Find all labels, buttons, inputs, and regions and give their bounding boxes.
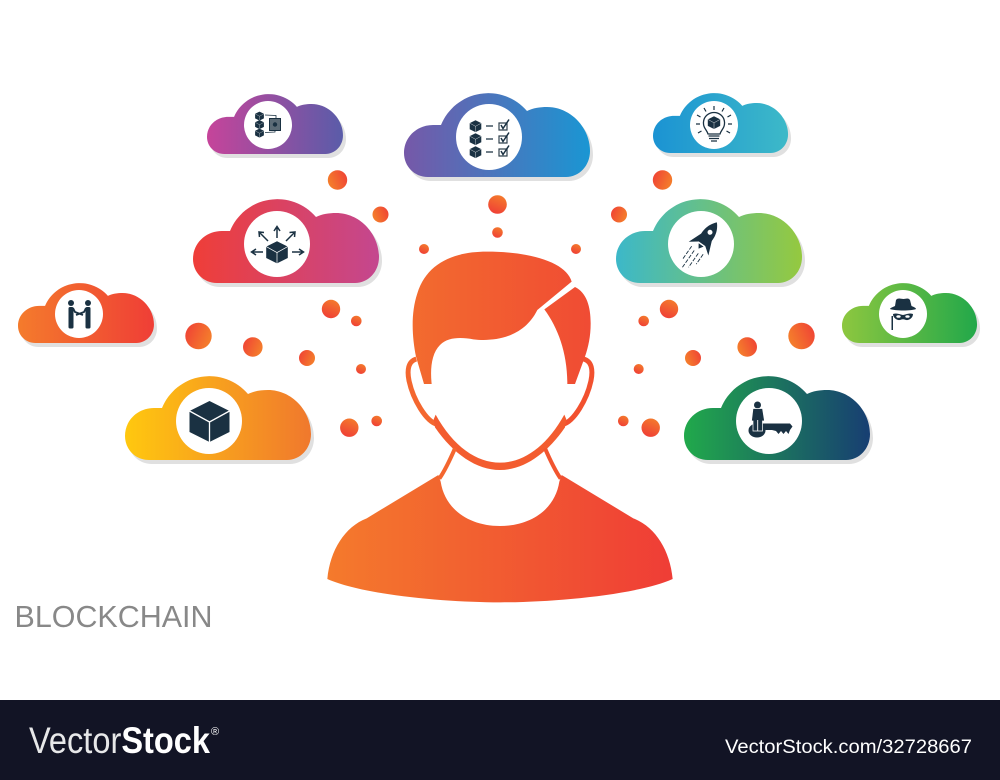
cloud: blue checklist xyxy=(404,93,593,181)
cloud: red distribution xyxy=(193,199,382,287)
dots: connecting bubbles xyxy=(185,170,815,437)
icon: hat and mask xyxy=(890,299,916,330)
cloud: cyan lightbulb xyxy=(653,93,791,157)
title: BLOCKCHAIN: BLOCKCHAIN xyxy=(14,599,212,634)
cloud: orange handshake xyxy=(18,283,157,347)
icon: rocket xyxy=(674,216,727,276)
icon: handshake xyxy=(68,300,91,328)
icon: cube checklist xyxy=(470,120,509,158)
cloud: teal key xyxy=(684,376,873,464)
cloud: green mask xyxy=(842,283,980,347)
torso xyxy=(327,475,673,602)
icon: cube xyxy=(190,401,230,442)
face and neck outline xyxy=(408,359,592,479)
central person xyxy=(327,252,673,602)
hair: main xyxy=(413,252,572,384)
footer image id: VectorStock.com/32728667 xyxy=(725,737,972,758)
icon: lightbulb with cube xyxy=(696,106,732,141)
cloud: purple vault xyxy=(207,94,346,158)
footer logo: VectorStock: VectorStock xyxy=(29,720,210,761)
icon: person on key xyxy=(748,402,792,438)
icon: cube with outward arrows xyxy=(252,226,304,263)
cloud: green rocket xyxy=(616,199,805,287)
hair: side xyxy=(544,287,591,384)
footer registered mark: ® xyxy=(211,726,219,738)
footer bar xyxy=(0,700,1000,780)
cloud: yellow cube xyxy=(125,376,314,464)
icon: cubes to vault xyxy=(255,112,280,138)
